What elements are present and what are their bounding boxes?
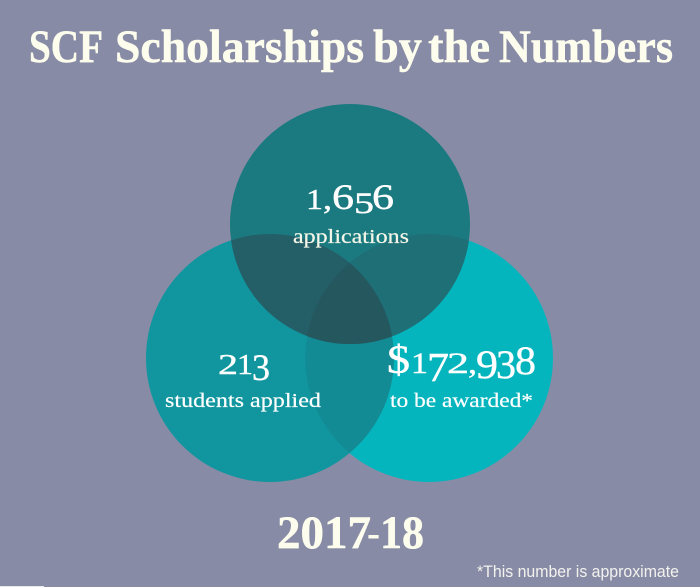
stat: students applied: 3 bbox=[252, 348, 270, 389]
title: the bbox=[428, 21, 490, 73]
year label bbox=[277, 507, 424, 559]
title: Scholarships bbox=[115, 21, 364, 73]
stat: to be awarded: 2 bbox=[447, 347, 469, 380]
stat: to be awarded: 3 bbox=[496, 342, 516, 387]
circle: students applied bbox=[146, 234, 394, 482]
stat: to be awarded bbox=[387, 337, 536, 412]
stat: to be awarded: 8 bbox=[515, 338, 536, 383]
year label: - bbox=[367, 507, 380, 559]
circle: to be awarded bbox=[305, 234, 553, 482]
stat: students applied: students applied bbox=[165, 390, 321, 412]
overlap: students and awarded bbox=[305, 336, 394, 453]
stat: applications bbox=[293, 177, 409, 248]
title bbox=[29, 21, 673, 73]
stat: to be awarded: , bbox=[468, 347, 477, 380]
title: by bbox=[373, 21, 422, 73]
stat: applications: applications bbox=[293, 226, 409, 248]
overlap: all three bbox=[307, 263, 392, 344]
circle: applications bbox=[230, 104, 470, 344]
stat: to be awarded: 9 bbox=[476, 342, 498, 387]
stat: to be awarded: to be awarded* bbox=[390, 390, 533, 412]
stat: students applied bbox=[165, 348, 321, 412]
stat: to be awarded: 1 bbox=[411, 347, 428, 380]
stat: applications: 5 bbox=[354, 187, 374, 220]
stat: applications: , bbox=[323, 184, 332, 216]
stat: applications: 6 bbox=[332, 177, 354, 217]
stat: students applied: 2 bbox=[218, 349, 238, 381]
stat: to be awarded: 7 bbox=[427, 344, 449, 390]
footnote: *This number is approximate bbox=[477, 562, 679, 581]
stat: applications: 6 bbox=[372, 177, 394, 217]
overlap: applications and students bbox=[231, 234, 350, 336]
stat: applications: 1 bbox=[306, 184, 323, 216]
title: Numbers bbox=[499, 21, 673, 73]
stat: students applied: 1 bbox=[237, 349, 253, 381]
year label: 18 bbox=[380, 507, 424, 559]
overlap: applications and awarded bbox=[350, 234, 469, 336]
venn diagram bbox=[146, 104, 553, 482]
stat: to be awarded: $ bbox=[387, 337, 410, 382]
year label: 2017 bbox=[277, 507, 371, 559]
bottom edge strip bbox=[0, 586, 44, 587]
title: SCF bbox=[29, 21, 103, 73]
